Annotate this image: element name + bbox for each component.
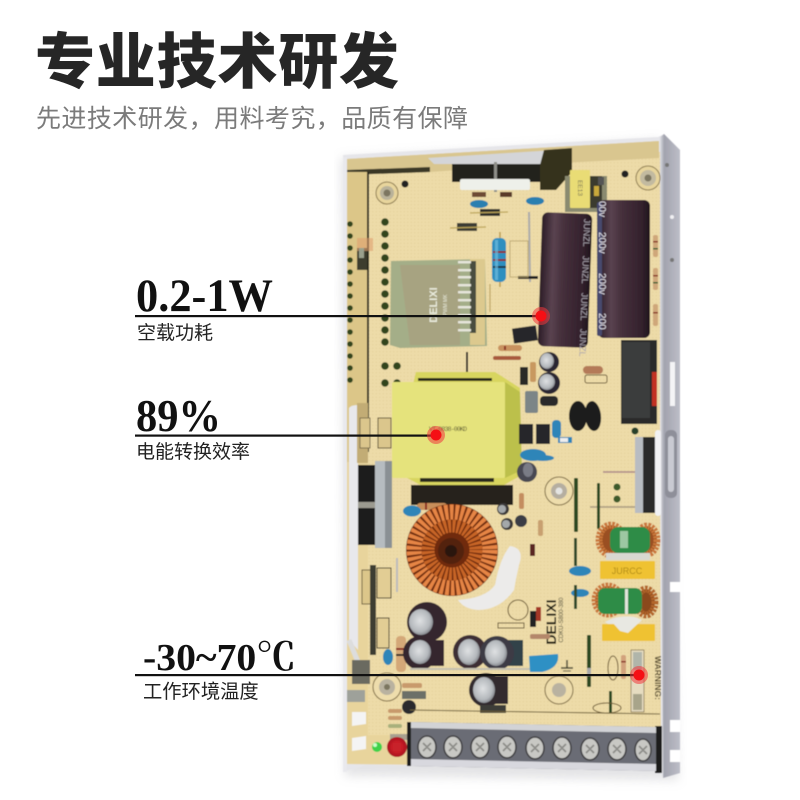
PWM module: PWM MK: [443, 294, 449, 316]
metal chassis: [343, 134, 680, 778]
main transformer: VT-0838-00KD: [429, 426, 467, 433]
main transformer: [392, 372, 522, 505]
left lower connector and resistor: [349, 558, 406, 684]
yellow X capacitor upper: JURCC: [612, 566, 643, 576]
small transformer EE13: [565, 170, 607, 212]
electrolytic capacitors bottom row: [403, 602, 530, 713]
leader line: [135, 434, 436, 437]
colored resistors right column: [653, 235, 658, 326]
top heat sink: [428, 148, 572, 192]
transistor under capacitor: [466, 325, 538, 378]
product photo: power supply unit: [341, 134, 680, 780]
board mid right diodes and DELIXI label: CDKU-S800-380: [559, 597, 565, 643]
callout: operating temperature: [135, 637, 648, 703]
marker dot: [532, 307, 550, 325]
mounting screw top left: [376, 180, 408, 204]
value: 89%: [136, 390, 221, 441]
label: 空载功耗: [137, 322, 213, 344]
electrolytic capacitor 1: JUNZL: [579, 293, 590, 321]
electrolytic capacitor 1: JUNZL: [581, 219, 592, 247]
yellow X capacitor upper: [600, 561, 655, 579]
right heat sink block upper: [621, 340, 657, 434]
marker dot: [630, 666, 648, 684]
terminal screws: [418, 736, 651, 761]
label: 电能转换效率: [136, 441, 250, 463]
yellow X capacitor lower: [602, 616, 655, 641]
right side flange: [659, 134, 680, 778]
mounting screw top right: [622, 166, 660, 190]
small capacitors mid: [520, 352, 607, 413]
PWM module: [390, 259, 487, 348]
electrolytic capacitor 2: 00v: [596, 201, 607, 217]
subtitle: 先进技术研发，用料考究，品质有保障: [36, 105, 468, 133]
PWM module: DELIXI: [428, 287, 440, 323]
fuse: WARNING:: [653, 656, 663, 700]
mounting screw lower left: [373, 673, 401, 701]
lower left parts: [347, 683, 660, 751]
electrolytic capacitor 1: JUNZL: [580, 256, 591, 284]
top inner wall: [347, 141, 659, 175]
marker dot: [427, 426, 445, 444]
left silver heat sink bar: [349, 403, 392, 650]
electrolytic capacitor 1: [537, 212, 592, 357]
mounting screw lower right: [545, 676, 573, 704]
common mode choke lower: [595, 586, 655, 632]
optocouplers: [517, 420, 572, 482]
electrolytic capacitor 2: 200: [596, 313, 607, 330]
left wall: [347, 172, 368, 462]
fuse: [608, 650, 663, 712]
electrolytic capacitor 2: 200v: [596, 273, 607, 295]
callout: standby power: [135, 270, 550, 344]
callout: efficiency: [135, 390, 445, 463]
label: 工作环境温度: [143, 681, 259, 703]
title: 专业技术研发: [35, 29, 399, 96]
electrolytic capacitor 1: JUNZL: [577, 328, 588, 357]
common mode choke upper: [599, 525, 657, 560]
left bracket clip: [357, 238, 373, 270]
value: 0.2-1W: [136, 270, 273, 322]
left ventilation holes: [347, 218, 401, 387]
electrolytic capacitor 2: 200v: [596, 232, 607, 254]
terminal block: [407, 722, 662, 773]
right heat sink block lower: [574, 430, 661, 532]
board mid right diodes and DELIXI label: DELIXI: [543, 599, 559, 645]
circuit board: [345, 141, 661, 768]
blue fuse resistor: [492, 232, 506, 287]
leader line: [135, 674, 639, 676]
leader line: [135, 315, 541, 317]
mounting screw centre: [545, 477, 620, 505]
value: -30~70℃: [143, 637, 296, 679]
rectifier rows under transformer: [403, 493, 543, 556]
blue capacitor and ground symbol: [529, 654, 573, 672]
chassis drop shadow: [341, 140, 678, 780]
electrolytic capacitor 2: [596, 200, 650, 338]
indicator LEDs: [372, 734, 408, 757]
black inductors: [569, 400, 603, 432]
small transformer EE13: EE13: [576, 180, 583, 196]
copper toroid inductor: [406, 504, 498, 596]
board mid right diodes and DELIXI label: [498, 538, 621, 713]
small parts upper board: [450, 192, 544, 312]
white glue blob: [458, 546, 521, 610]
